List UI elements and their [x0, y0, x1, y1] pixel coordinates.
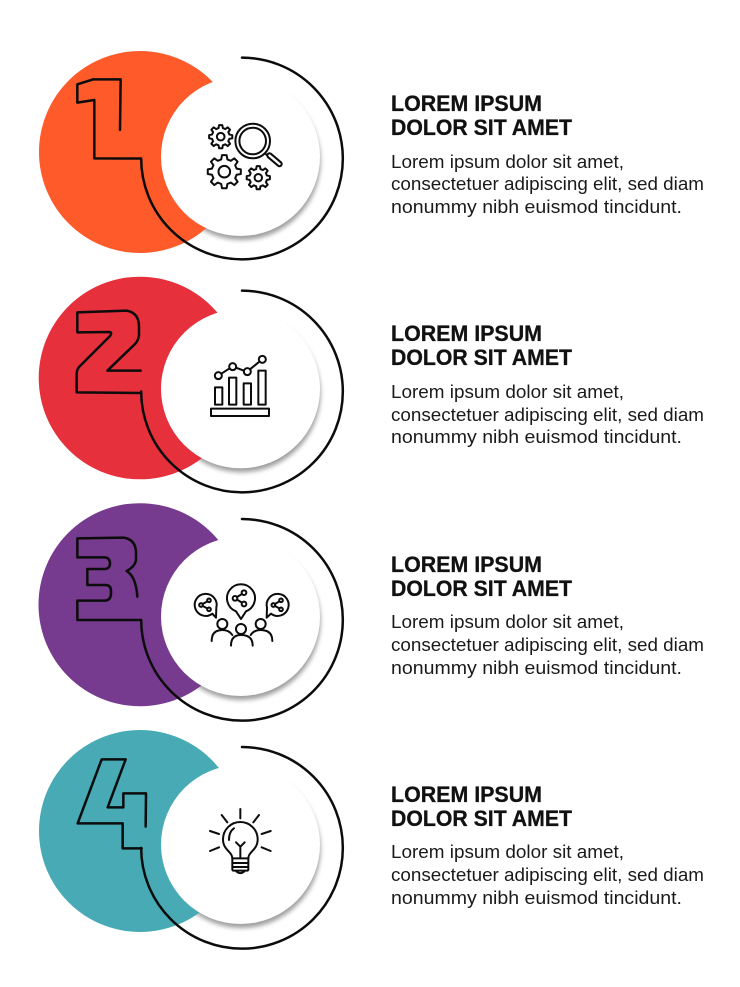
text block: step 1: Lorem ipsum dolor sit amet,	[391, 152, 624, 172]
icon: team sharing	[195, 584, 289, 646]
ring and numeral 3 outline	[77, 519, 343, 721]
ring and numeral 4 outline	[78, 747, 343, 949]
icon: light bulb	[210, 809, 271, 873]
icon: gears and magnifier	[208, 124, 280, 189]
white circle	[161, 765, 320, 924]
icon: bar chart	[211, 356, 269, 416]
red circle	[39, 277, 241, 479]
text block: step 1: LOREM IPSUM	[391, 91, 542, 116]
orange circle	[39, 51, 241, 253]
text block: step 3: DOLOR SIT AMET	[391, 576, 573, 601]
text block: step 3: Lorem ipsum dolor sit amet,	[391, 612, 624, 632]
text block: step 2: nonummy nibh euismod tincidunt.	[391, 427, 682, 447]
text block: step 3: consectetuer adipiscing elit, sed diam	[391, 635, 704, 655]
white circle	[161, 77, 320, 236]
text block: step 4: Lorem ipsum dolor sit amet,	[391, 842, 624, 862]
text block: step 3	[391, 552, 704, 678]
teal circle	[39, 730, 241, 932]
text block: step 3: nonummy nibh euismod tincidunt.	[391, 658, 682, 678]
white circle	[161, 309, 320, 468]
text block: step 4: nonummy nibh euismod tincidunt.	[391, 888, 682, 908]
text block: step 2: Lorem ipsum dolor sit amet,	[391, 382, 624, 402]
text block: step 1	[391, 91, 704, 217]
text block: step 4: DOLOR SIT AMET	[391, 806, 573, 831]
text block: step 4: LOREM IPSUM	[391, 782, 542, 807]
white circle shadow	[162, 82, 320, 240]
panel: step 1	[39, 51, 343, 259]
text block: step 2: consectetuer adipiscing elit, sed diam	[391, 405, 704, 425]
text block: step 1: consectetuer adipiscing elit, sed diam	[391, 174, 704, 194]
white circle shadow	[162, 770, 320, 928]
text block: step 1: nonummy nibh euismod tincidunt.	[391, 197, 682, 217]
ring and numeral 2 outline	[77, 291, 343, 492]
text block: step 2: DOLOR SIT AMET	[391, 345, 573, 370]
text block: step 1: DOLOR SIT AMET	[391, 115, 573, 140]
text block: step 4: consectetuer adipiscing elit, sed diam	[391, 865, 704, 885]
text block: step 3: LOREM IPSUM	[391, 552, 542, 577]
text block: step 4	[391, 782, 704, 908]
white circle shadow	[162, 314, 320, 472]
text block: step 2	[391, 321, 704, 447]
ring and numeral 1 outline	[77, 58, 343, 259]
purple circle	[38, 503, 242, 706]
text block: step 2: LOREM IPSUM	[391, 321, 542, 346]
white circle	[161, 537, 320, 696]
panel: step 4	[39, 730, 343, 949]
white circle shadow	[162, 542, 320, 700]
panel: step 3	[38, 503, 343, 721]
panel: step 2	[39, 277, 343, 492]
